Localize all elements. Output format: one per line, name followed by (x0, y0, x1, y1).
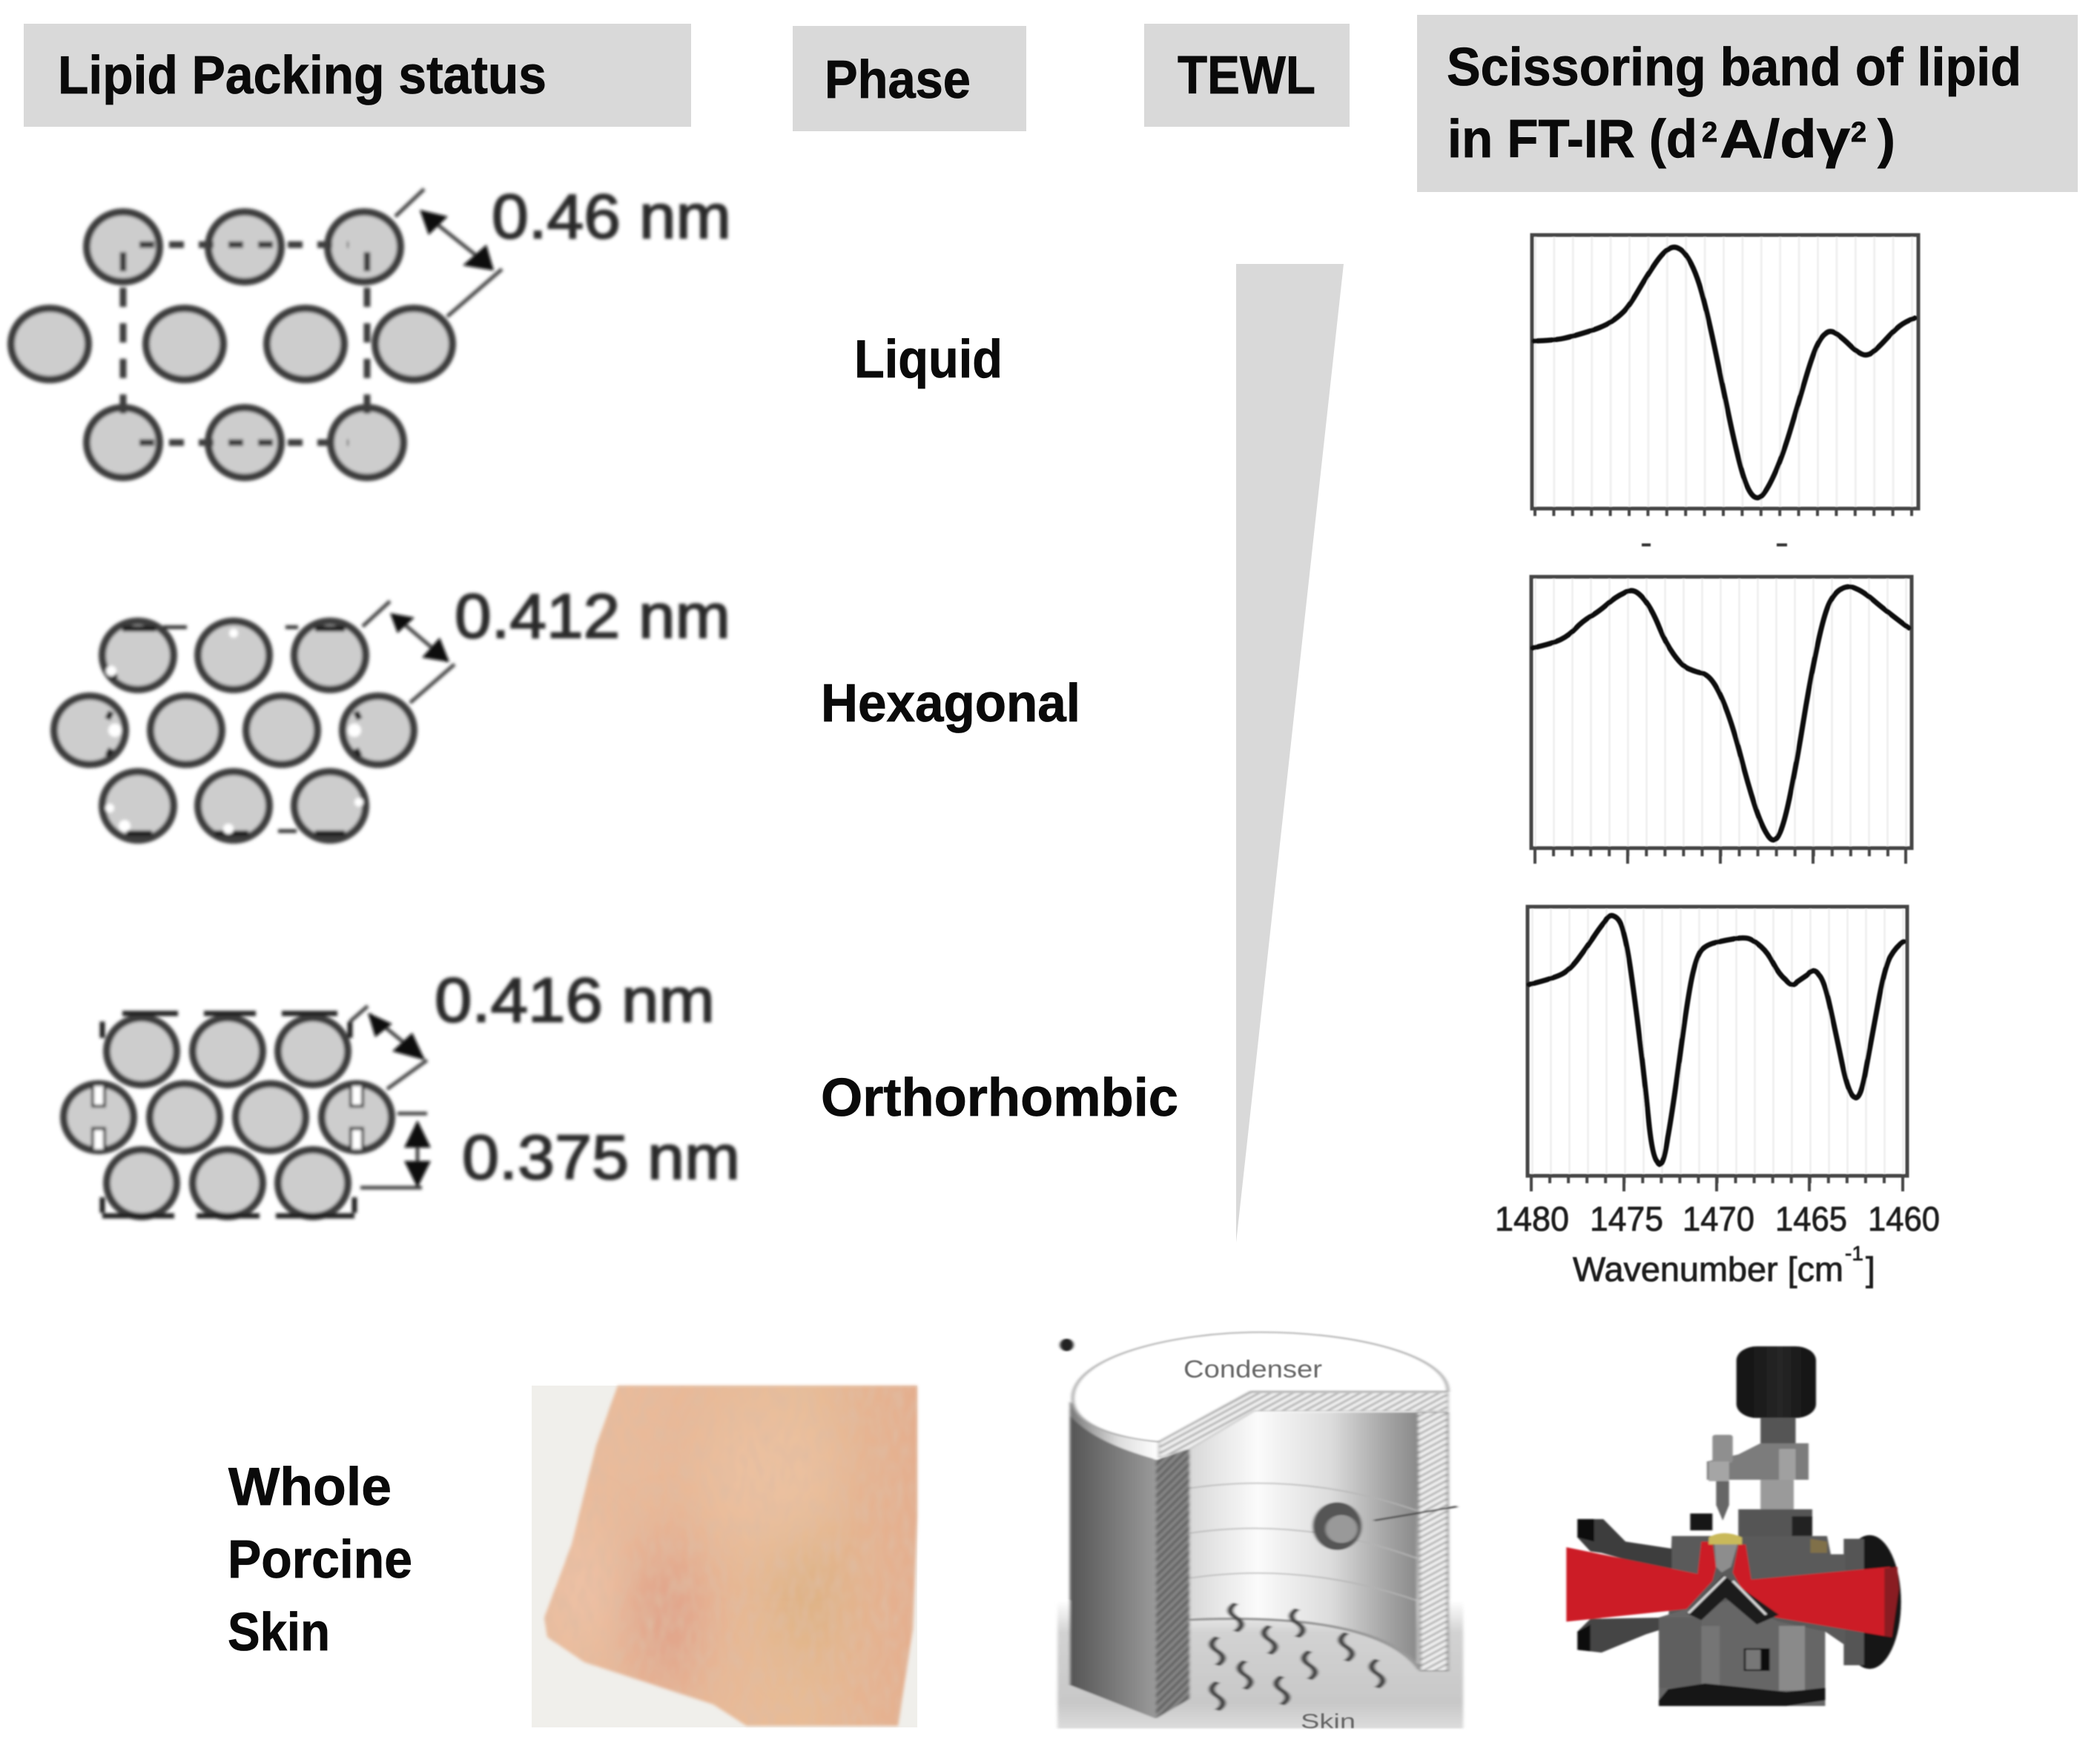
diagram: hexagonal lipid packing 0.412 nm (54, 581, 730, 840)
label: Liquid: Liquid (854, 330, 1003, 389)
axis tick labels (1495, 1200, 1940, 1238)
axis title: Wavenumber: -1 (1845, 1242, 1863, 1265)
chart: FT-IR spectrum, orthorhombic, with axis (1495, 907, 1940, 1288)
header: Scissoring band of lipid in FT-IR (1417, 15, 2078, 192)
header: Scissoring band of lipid in FT-IR: ) (1878, 110, 1895, 169)
photo: whole porcine skin (532, 1386, 917, 1727)
label: Orthorhombic: Orthorhombic (821, 1068, 1178, 1128)
diagram: orthorhombic lipid packing 0.416 nm and 0.375 nm: 0.416 nm (435, 965, 715, 1035)
TEWL gradient wedge (1236, 264, 1344, 1243)
label: Whole Porcine Skin (228, 1458, 412, 1662)
label: Whole Porcine Skin: Whole (228, 1458, 392, 1517)
illustration: ATR FT-IR accessory with red beam (1566, 1346, 1901, 1706)
axis title: Wavenumber: Wavenumber [cm (1573, 1250, 1843, 1288)
header: Scissoring band of lipid in FT-IR: A/dγ (1720, 110, 1850, 169)
skin label: Skin (1301, 1710, 1356, 1733)
axis tick labels: 1470 (1683, 1200, 1754, 1238)
header: TEWL: TEWL (1178, 46, 1315, 105)
axis tick labels: 1480 (1495, 1200, 1569, 1238)
header: Lipid Packing status: Lipid Packing status (58, 46, 547, 105)
diagram: orthorhombic lipid packing 0.416 nm and 0.375 nm: 0.375 nm (462, 1122, 740, 1192)
axis title: Wavenumber: ] (1866, 1250, 1875, 1288)
header: Lipid Packing status (24, 24, 691, 127)
header: Phase (793, 26, 1026, 131)
illustration: TEWL condenser chamber (1057, 1332, 1463, 1733)
label: Whole Porcine Skin: Porcine (228, 1530, 412, 1589)
diagram: orthorhombic lipid packing 0.416 nm and 0.375 nm (64, 965, 740, 1217)
diagram: hexagonal lipid packing 0.412 nm: 0.412 nm (455, 581, 730, 651)
diagram: liquid lipid packing 0.46 nm: 0.46 nm (492, 182, 731, 251)
chart: FT-IR spectrum, liquid (1532, 235, 1918, 545)
condenser label: Condenser (1183, 1355, 1322, 1383)
header: Scissoring band of lipid in FT-IR: Scissoring band of lipid (1447, 38, 2021, 97)
axis tick labels: 1475 (1590, 1200, 1663, 1238)
axis tick labels: 1465 (1775, 1200, 1847, 1238)
diagram: liquid lipid packing 0.46 nm (11, 182, 731, 477)
header: Scissoring band of lipid in FT-IR: in FT-IR (d (1447, 110, 1697, 169)
label: Whole Porcine Skin: Skin (228, 1603, 330, 1662)
label: Hexagonal: Hexagonal (821, 674, 1080, 733)
header: TEWL (1144, 24, 1350, 127)
chart: FT-IR spectrum, hexagonal (1531, 577, 1912, 864)
header: Scissoring band of lipid in FT-IR: 2 (1851, 117, 1866, 148)
axis tick labels: 1460 (1868, 1200, 1940, 1238)
header: Scissoring band of lipid in FT-IR: 2 (1702, 117, 1717, 148)
header: Phase: Phase (825, 50, 971, 110)
